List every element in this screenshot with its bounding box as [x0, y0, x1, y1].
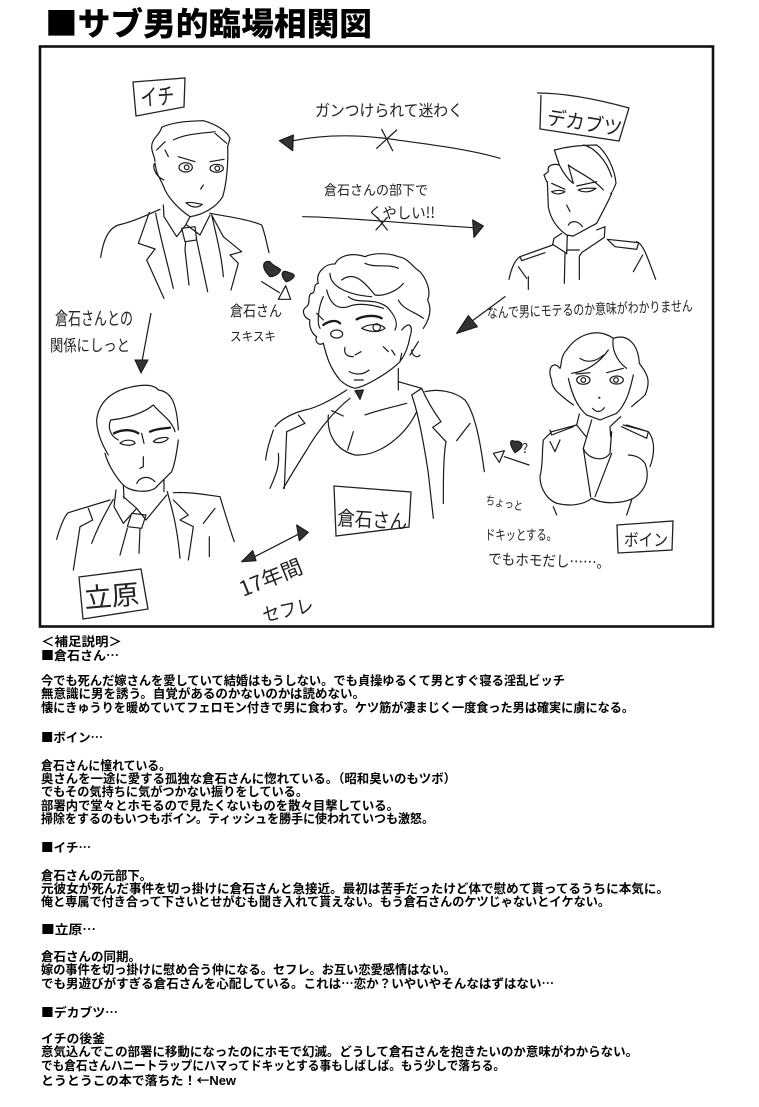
text block: Kuraishi: 今でも死んだ嫁さんを愛していて結婚はもうしない。でも貞操ゆるくて男とすぐ寝る淫乱ビッチ	[41, 670, 565, 689]
text block: Ichi: 俺と専属で付き合って下さいとせがむも聞き入れて貰えない。もう倉石さんのケツじゃないとイケない。	[41, 891, 610, 910]
note: Ichi to Dekabutsu arrow with caption	[279, 97, 500, 158]
text block: Tachihara: 嫁の事件を切っ掛けに慰め合う仲になる。セフレ。お互い恋愛感情はない。	[41, 959, 456, 978]
text block: Boin	[41, 727, 456, 827]
note: Ichi loves Kuraishi with hearts and arrow	[230, 261, 294, 345]
note: Ichi loves Kuraishi with hearts and arrow: 倉石さん	[230, 300, 282, 321]
panel: relationship chart frame	[40, 46, 713, 626]
note: 17-year relationship double arrow with caption	[234, 525, 316, 628]
note: Ichi to Tachihara arrow with caption	[50, 305, 151, 373]
text block: Boin: でもその気持ちに気がつかない振りをしている。	[41, 781, 308, 800]
note: Dekabutsu to Ichi arrow with caption: くやしい!!	[368, 202, 435, 223]
note: Boin to Kuraishi arrow with heart and caption: ちょっと	[484, 491, 525, 515]
text block: Tachihara	[41, 919, 554, 992]
label: Ichi name box: イチ	[139, 77, 175, 113]
note: Dekabutsu to Kuraishi arrow with caption	[457, 295, 693, 333]
character: Ichi	[101, 121, 269, 298]
note: Boin to Kuraishi arrow with heart and caption: でもホモだし……。	[488, 548, 610, 573]
text block: Kuraishi: 懐にきゅうりを暖めていてフェロモン付きで男に食わす。ケツ筋が凄まじく一度食った男は確実に虜になる。	[41, 697, 634, 716]
label: Kuraishi name box: 倉石さん	[337, 502, 408, 535]
text block: Tachihara: 倉石さんの同期。	[41, 946, 141, 965]
note: Boin to Kuraishi arrow with heart and caption	[484, 438, 610, 573]
note: Ichi loves Kuraishi with hearts and arrow: スキスキ	[230, 326, 276, 345]
heading: supplementary notes: ＜補足説明＞	[41, 631, 122, 650]
note: Ichi to Tachihara arrow with caption: 倉石さんとの	[55, 305, 133, 331]
text block: Kuraishi: 無意識に男を誘う。自覚があるのかないのかは読めない。	[41, 683, 365, 702]
text block: Tachihara: ■立原…	[41, 919, 96, 938]
text block: Ichi: ■イチ…	[41, 837, 91, 856]
text block: Dekabutsu: とうとうこの本で落ちた！← New	[41, 1070, 236, 1089]
text block: Ichi: 倉石さんの元部下。	[41, 865, 152, 884]
text block: Kuraishi: ■倉石さん…	[41, 645, 119, 664]
text block: Dekabutsu	[41, 1002, 638, 1089]
note: Dekabutsu to Ichi arrow with caption	[303, 179, 483, 237]
character: Dekabutsu	[509, 145, 656, 289]
character: Boin	[540, 333, 654, 515]
text block: Dekabutsu: ■デカブツ…	[41, 1002, 118, 1021]
note: Boin to Kuraishi arrow with heart and caption: ドキッとする。	[485, 525, 557, 545]
text block: Ichi	[41, 837, 669, 910]
note: Dekabutsu to Kuraishi arrow with caption: なんで男にモテるのか意味がわかりません	[486, 295, 693, 323]
label: Dekabutsu name box: デカブツ	[545, 101, 625, 142]
label: Boin name box: ボイン	[624, 526, 668, 551]
character: Tachihara	[57, 385, 234, 570]
text block: Boin: 奥さんを一途に愛する孤独な倉石さんに惚れている。（昭和臭いのもツボ）	[41, 768, 456, 787]
text block: Boin: 部署内で堂々とホモるので見たくないものを散々目撃している。	[41, 795, 399, 814]
note: 17-year relationship double arrow with caption: 17年間	[234, 551, 307, 603]
text block: Kuraishi	[41, 645, 634, 716]
character: Kuraishi	[266, 254, 484, 518]
text block: Tachihara: でも男遊びがすぎる倉石さんを心配している。これは…恋か？いやいやそんなはずはない…	[41, 973, 554, 992]
note: Ichi to Dekabutsu arrow with caption: ガンつけられて迷わく	[315, 97, 463, 121]
text block: Boin: 倉石さんに憧れている。	[41, 755, 171, 774]
label: Kuraishi name box	[334, 486, 411, 536]
label: Tachihara name box: 立原	[82, 572, 140, 616]
text block: Dekabutsu: でも倉石さんハニートラップにハマってドキッとする事もしばしば。もう少しで落ちる。	[41, 1055, 505, 1074]
note: Dekabutsu to Ichi arrow with caption: 倉石さんの部下で	[324, 179, 428, 199]
text block: Boin: ■ボイン…	[41, 727, 103, 746]
text block: Dekabutsu: イチの後釜	[41, 1028, 105, 1047]
note: 17-year relationship double arrow with caption: セフレ	[260, 591, 316, 628]
text block: Ichi: 元彼女が死んだ事件を切っ掛けに倉石さんと急接近。最初は苦手だったけど体で慰めて貰ってるうちに本気に。	[41, 878, 669, 897]
title: ■サブ男的臨場相関図	[45, 0, 372, 45]
text block: Boin: 掃除をするのもいつもボイン。ティッシュを勝手に使われていつも激怒。	[41, 808, 434, 827]
text block: Dekabutsu: 意気込んでこの部署に移動になったのにホモで幻滅。どうして倉石さんを抱きたいのか意味がわからない。	[41, 1041, 638, 1060]
label: Boin name box	[617, 521, 673, 553]
note: Ichi to Tachihara arrow with caption: 関係にしっと	[50, 332, 130, 356]
note: Boin to Kuraishi arrow with heart and caption: ?	[522, 438, 528, 457]
